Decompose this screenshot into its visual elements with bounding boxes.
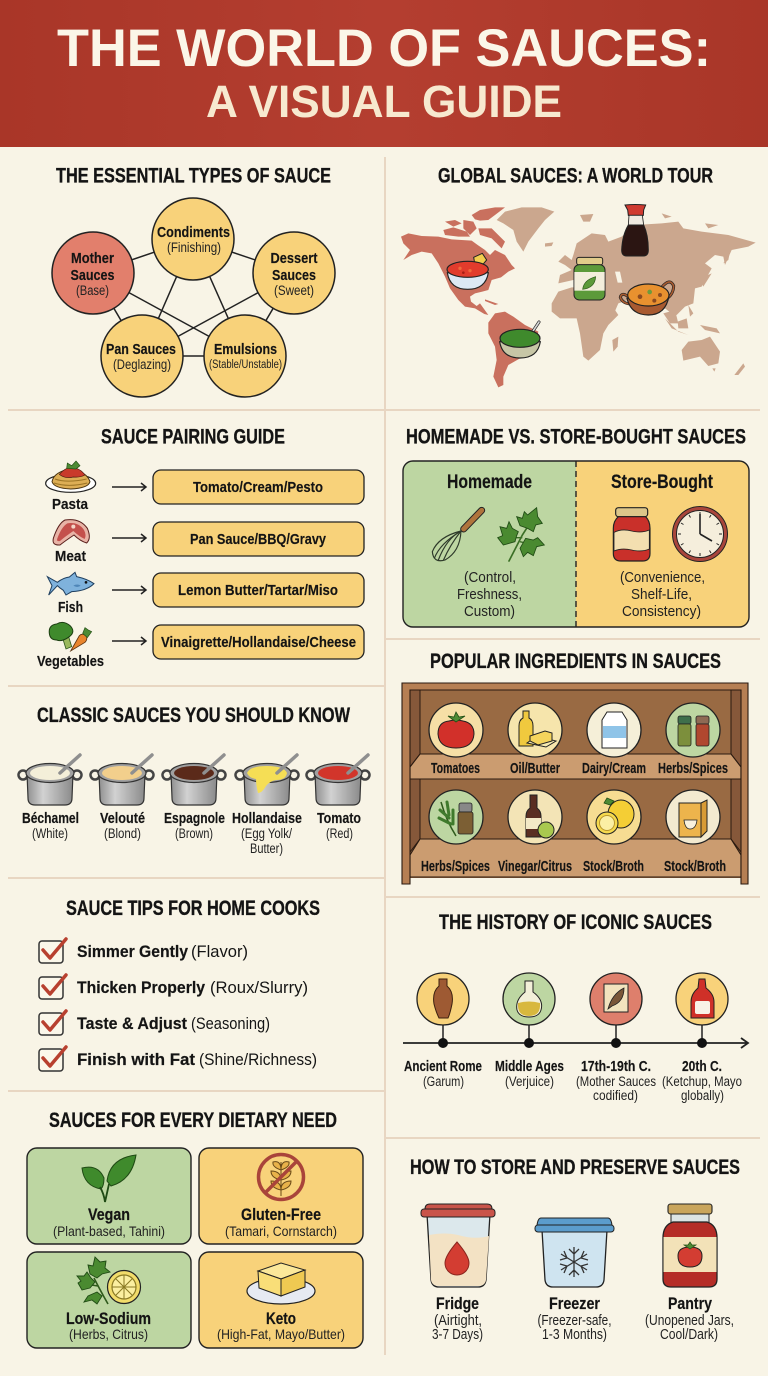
item: pantry: Cool/Dark) [660, 1326, 718, 1343]
row: vegetables: Vegetables [37, 654, 104, 670]
card: vegan: (Plant-based, Tahini) [53, 1223, 165, 1239]
heading: classic sauces: CLASSIC SAUCES YOU SHOULD KNOW [37, 703, 351, 727]
heading: pairing guide: SAUCE PAIRING GUIDE [101, 424, 285, 448]
event: 17th-19th century [576, 973, 656, 1103]
row: vegetables [37, 622, 364, 670]
panel: classic sauces [18, 703, 370, 856]
pill: fish sauces [153, 573, 364, 607]
event: middle ages: (Verjuice) [505, 1074, 554, 1089]
item: freezer [535, 1218, 614, 1343]
panel: essential types of sauce [52, 164, 335, 397]
arrow [112, 586, 146, 594]
event: middle ages: Middle Ages [495, 1059, 564, 1075]
shelf [402, 683, 748, 884]
item: tomato [306, 755, 370, 841]
icon: pesto jar [574, 257, 605, 300]
icon: clock [672, 506, 728, 562]
icon: salsa bowl [447, 253, 488, 289]
tip: finish with fat: Finish with Fat [77, 1050, 195, 1069]
heading: dietary needs: SAUCES FOR EVERY DIETARY NEED [49, 1108, 337, 1132]
event: middle ages [495, 973, 564, 1089]
row: meat: Meat [55, 549, 86, 565]
card: gluten-free: (Tamari, Cornstarch) [225, 1223, 337, 1239]
pill: meat sauces [153, 522, 364, 556]
item: oil and butter [508, 703, 562, 777]
item: espagnole [162, 755, 226, 841]
card: low-sodium: (Herbs, Citrus) [69, 1326, 148, 1342]
item: lemons [583, 790, 644, 875]
text: homemade benefits: Freshness, [457, 586, 522, 603]
pill: vegetable sauces [153, 625, 364, 659]
pill: fish sauces: Lemon Butter/Tartar/Miso [178, 583, 338, 599]
network diagram: (Deglazing) [113, 357, 171, 372]
item: veloute: Velouté [100, 811, 145, 827]
tip: taste and adjust: Taste & Adjust [77, 1014, 187, 1033]
card: vegan: Vegan [88, 1205, 130, 1224]
item: fridge: (Airtight, [434, 1312, 482, 1329]
event: 17th-19th century: codified) [593, 1088, 638, 1103]
network diagram: Pan Sauces [106, 342, 176, 358]
panel: sauce pairing guide [37, 424, 364, 670]
shelf row 2 [421, 790, 726, 875]
item: broth carton [664, 790, 726, 875]
event: 20th century [662, 973, 742, 1103]
panel: dietary needs [27, 1108, 363, 1348]
panel: popular ingredients [402, 649, 748, 884]
network diagram: Emulsions [214, 342, 277, 358]
item: bechamel: (White) [32, 826, 68, 841]
icon: soy sauce bottle [622, 204, 648, 256]
text: store-bought benefits: (Convenience, [620, 569, 705, 586]
timeline axis [403, 1038, 748, 1048]
tip: simmer gently: (Flavor) [191, 942, 248, 961]
network diagram: (Base) [76, 283, 109, 298]
item: tomatoes: Tomatoes [431, 761, 480, 777]
network diagram: Sauces [272, 268, 316, 284]
item: lemons: Stock/Broth [583, 859, 644, 875]
tip: taste and adjust [39, 1011, 270, 1035]
icon: chimichurri bowl [500, 322, 540, 358]
event: ancient rome: Ancient Rome [404, 1059, 482, 1075]
tip: finish with fat [39, 1047, 317, 1071]
event: 20th century: 20th C. [682, 1059, 722, 1075]
header banner: A VISUAL GUIDE [206, 76, 562, 127]
card: gluten-free [199, 1148, 363, 1244]
world map [401, 204, 756, 387]
item: freezer: 1-3 Months) [542, 1326, 607, 1343]
text: homemade benefits: Custom) [464, 603, 515, 620]
item: freezer: (Freezer-safe, [538, 1312, 612, 1329]
tip: thicken properly [39, 975, 308, 999]
text: store-bought benefits: Shelf-Life, [631, 586, 692, 603]
panel: homemade vs store-bought [403, 424, 749, 627]
tip: simmer gently: Simmer Gently [77, 942, 188, 961]
item: vinegar and lime [498, 790, 572, 875]
panel: global sauces world tour [401, 164, 756, 387]
header banner [0, 0, 768, 147]
card: vegan [27, 1148, 191, 1244]
arrow [112, 483, 146, 491]
item: broth carton: Stock/Broth [664, 859, 726, 875]
network diagram: Dessert [270, 251, 318, 267]
icon: whisk [432, 510, 482, 561]
icon: parsley [498, 508, 544, 561]
panel: homemade vs store-bought: Homemade [447, 472, 532, 493]
network diagram [52, 198, 335, 397]
item: dairy carton: Dairy/Cream [582, 761, 646, 777]
item: tomato: (Red) [326, 826, 353, 841]
item: espagnole: Espagnole [164, 811, 225, 827]
item: veloute [90, 755, 154, 841]
card: keto: (High-Fat, Mayo/Butter) [217, 1326, 345, 1342]
item: hollandaise [232, 755, 302, 856]
item: spice shakers [658, 703, 728, 777]
heading: essential types: THE ESSENTIAL TYPES OF SAUCE [56, 164, 331, 188]
network diagram: (Sweet) [274, 283, 314, 298]
text: store-bought benefits: Consistency) [622, 603, 701, 620]
tip: thicken properly: Thicken Properly [77, 978, 206, 997]
pill: vegetable sauces: Vinaigrette/Hollandaise/Cheese [161, 635, 356, 651]
card: keto: Keto [266, 1309, 296, 1328]
item: herbs and pepper [421, 790, 490, 875]
item: bechamel [18, 755, 82, 841]
item: veloute: (Blond) [104, 826, 141, 841]
card: low-sodium: Low-Sodium [66, 1309, 151, 1328]
item: vinegar and lime: Vinegar/Citrus [498, 859, 572, 875]
network diagram: (Finishing) [167, 240, 221, 255]
text: homemade benefits [457, 569, 522, 620]
item: pantry: (Unopened Jars, [645, 1312, 734, 1329]
text: store-bought benefits [620, 569, 705, 620]
panel: history of iconic sauces [403, 910, 748, 1103]
event: ancient rome: (Garum) [423, 1074, 464, 1089]
item: bechamel: Béchamel [22, 811, 79, 827]
pill: meat sauces: Pan Sauce/BBQ/Gravy [190, 532, 326, 548]
network diagram: (Stable/Unstable) [209, 359, 282, 371]
row: pasta [46, 461, 364, 513]
item: tomatoes [429, 703, 483, 777]
heading: sauce tips: SAUCE TIPS FOR HOME COOKS [66, 896, 320, 920]
icon: sauce jar [613, 508, 650, 561]
row: pasta: Pasta [52, 497, 89, 513]
tip: simmer gently [39, 939, 248, 963]
icon: fish [47, 572, 94, 595]
pill: pasta sauces [153, 470, 364, 504]
card: low-sodium [27, 1252, 191, 1348]
item: espagnole: (Brown) [175, 826, 213, 841]
network diagram: Sauces [70, 268, 114, 284]
item: hollandaise: Hollandaise [232, 811, 302, 827]
item: hollandaise: Butter) [250, 841, 283, 856]
item: spice shakers: Herbs/Spices [658, 761, 728, 777]
item: hollandaise: (Egg Yolk/ [241, 826, 292, 841]
tip: thicken properly: (Roux/Slurry) [210, 978, 308, 997]
tip: taste and adjust: (Seasoning) [191, 1014, 270, 1033]
panel: sauce tips [39, 896, 320, 1071]
event: 20th century: (Ketchup, Mayo [662, 1074, 742, 1089]
text: homemade benefits: (Control, [464, 569, 516, 586]
panel: store and preserve [410, 1155, 740, 1343]
item: freezer: Freezer [549, 1294, 600, 1313]
tip: finish with fat: (Shine/Richness) [199, 1050, 317, 1069]
pill: pasta sauces: Tomato/Cream/Pesto [193, 480, 323, 496]
arrow [112, 534, 146, 542]
event: 20th century: globally) [681, 1088, 724, 1103]
card: gluten-free: Gluten-Free [241, 1205, 321, 1224]
row: meat [53, 520, 364, 565]
item: pantry: Pantry [668, 1294, 712, 1313]
row: fish [47, 572, 364, 616]
item: oil and butter: Oil/Butter [510, 761, 560, 777]
network diagram: Mother [71, 251, 114, 267]
icon: steak [53, 520, 89, 545]
item: pantry [645, 1204, 734, 1343]
card: keto [199, 1252, 363, 1348]
network diagram: Condiments [157, 225, 230, 241]
icon: curry bowl [620, 282, 674, 315]
event: ancient rome [404, 973, 482, 1089]
shelf row 1 [429, 703, 728, 777]
event: 17th-19th century: (Mother Sauces [576, 1074, 656, 1089]
icon: broccoli and carrot [49, 622, 92, 651]
item: herbs and pepper: Herbs/Spices [421, 859, 490, 875]
icon: pasta plate [46, 461, 96, 492]
item: dairy carton [582, 703, 646, 777]
item: fridge: Fridge [436, 1294, 479, 1313]
arrow [112, 637, 146, 645]
event: 17th-19th century: 17th-19th C. [581, 1059, 651, 1075]
item: tomato: Tomato [317, 811, 361, 827]
header banner: THE WORLD OF SAUCES: [57, 19, 711, 78]
item: fridge [421, 1204, 495, 1343]
row: fish: Fish [58, 600, 83, 616]
panel: homemade vs store-bought: Store-Bought [611, 472, 714, 493]
item: fridge: 3-7 Days) [432, 1326, 483, 1343]
